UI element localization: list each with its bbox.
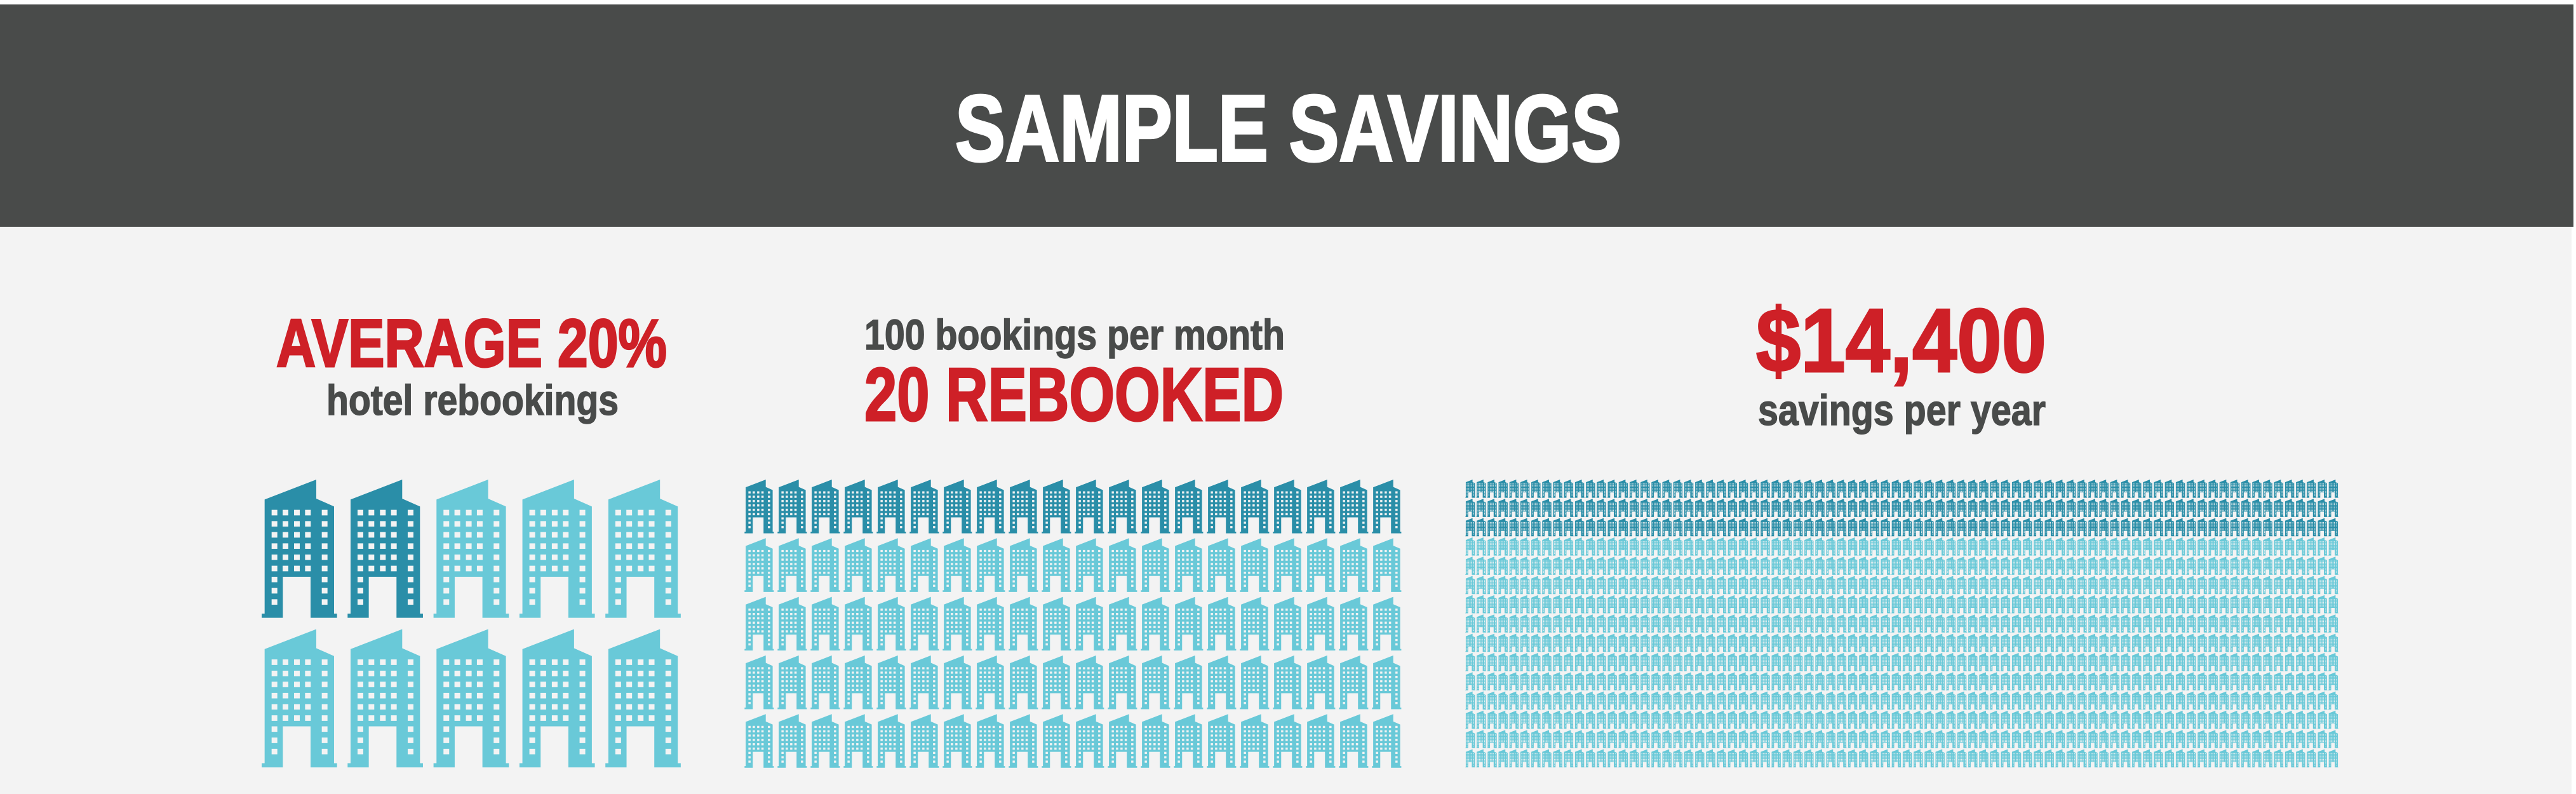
panel: light gray background bbox=[0, 227, 2572, 794]
subheading: hotel rebookings: hotel rebookings bbox=[326, 377, 619, 424]
heading: 20 rebooked: 20 REBOOKED bbox=[864, 353, 1284, 437]
text: savings per year: savings per year bbox=[1758, 386, 2046, 434]
icon grid: 1200 buildings, 240 rebooked bbox=[1465, 480, 2338, 767]
heading: $14,400: $14,400 bbox=[1756, 290, 2046, 391]
title: SAMPLE SAVINGS bbox=[955, 76, 1621, 181]
heading: average 20%: AVERAGE 20% bbox=[276, 305, 667, 381]
panel: $14,400 savings per year bbox=[1465, 290, 2338, 767]
panel: 100 bookings per month, 20 rebooked bbox=[744, 311, 1401, 768]
icon grid: 10 buildings, 2 rebooked bbox=[262, 480, 681, 767]
panel: average 20% hotel rebookings bbox=[262, 305, 681, 767]
text: 100 bookings per month: 100 bookings per month bbox=[864, 311, 1285, 359]
icon grid: 100 buildings, 20 rebooked bbox=[744, 480, 1401, 768]
header band bbox=[0, 4, 2573, 227]
